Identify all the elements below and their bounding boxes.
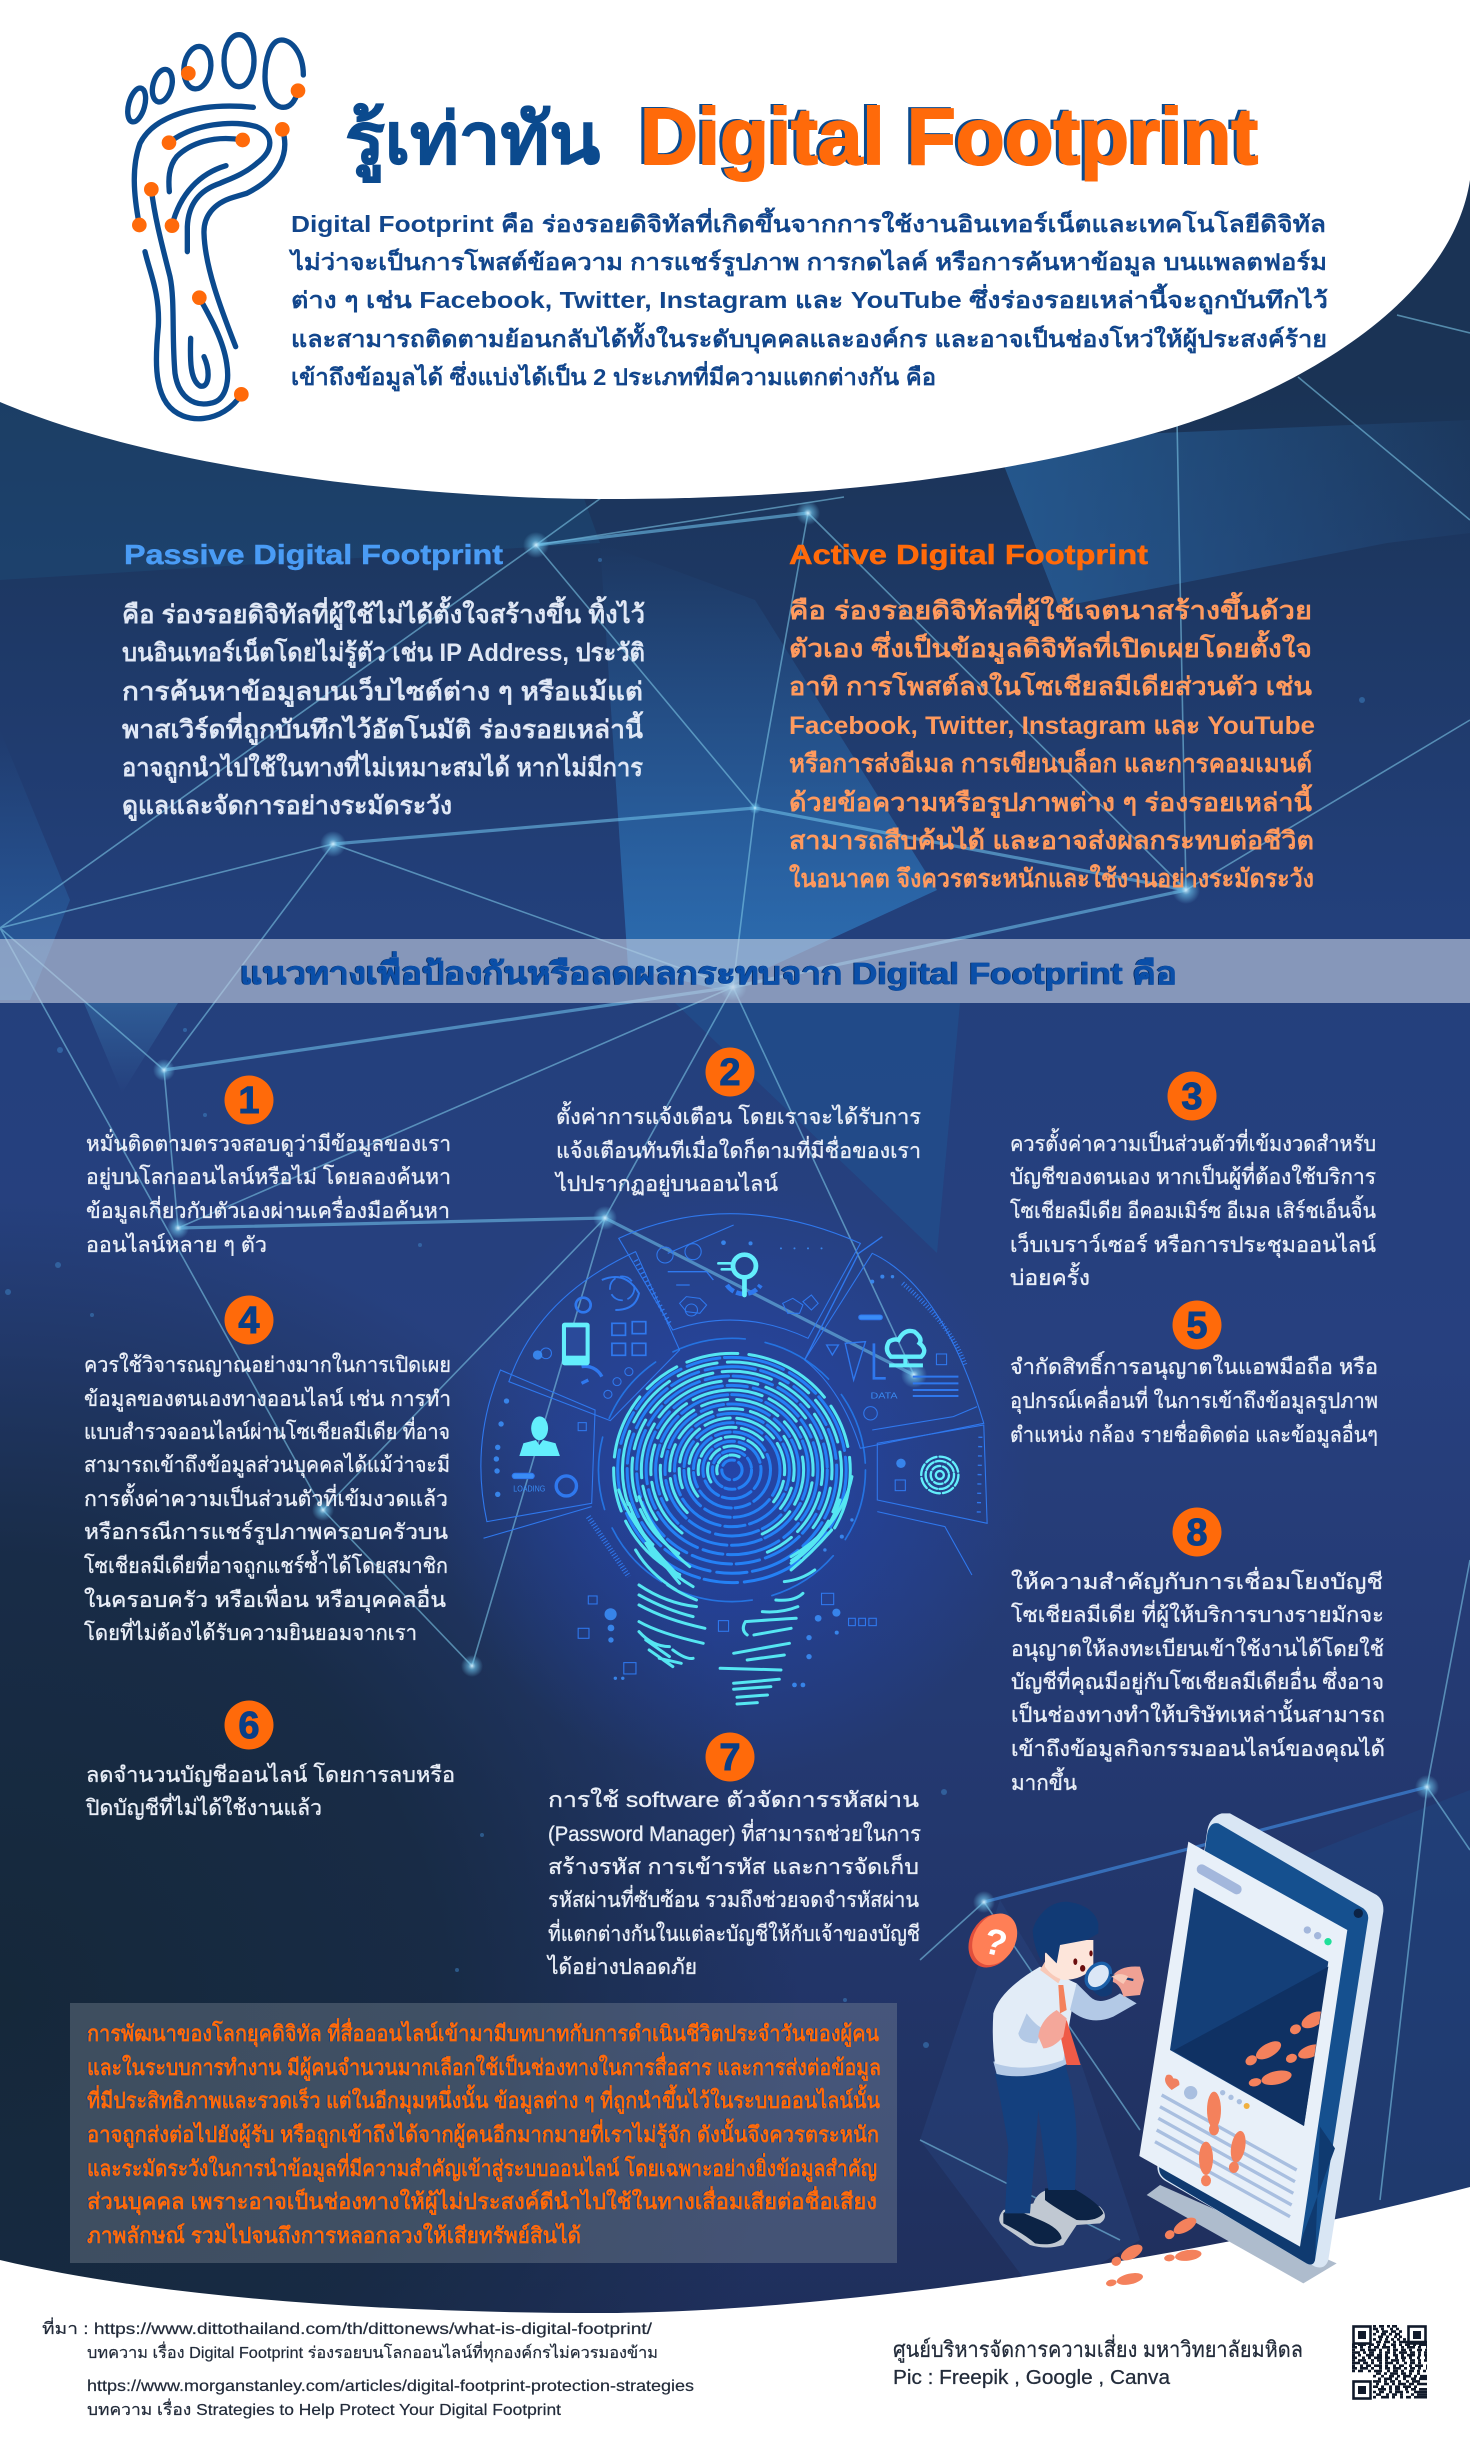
- panel: summary callout: ส่วนบุคคล เพราะอาจเป็นช่องทางให้ผู้ไม่ประสงค์ดีนำไปใช้ในทางเสื่อมเสียต่อชื่อเสียง: [87, 2185, 877, 2216]
- text: step 3: โซเชียลมีเดีย อีคอมเมิร์ซ อีเมล เสิร์ชเอ็นจิ้น: [1010, 1195, 1376, 1223]
- text block: active description: ในอนาคต จึงควรตระหนักและใช้งานอย่างระมัดระวัง: [789, 863, 1314, 893]
- text: loading and data labels: DATA: [871, 1391, 898, 1400]
- badge 6: 6: [238, 1705, 260, 1747]
- step 7: [546, 1732, 921, 1979]
- text: step 4: โซเชียลมีเดียที่อาจถูกแชร์ซ้ำได้โดยสมาชิก: [84, 1550, 448, 1579]
- text: step 7: รหัสผ่านที่ซับซ้อน รวมถึงช่วยจดจำรหัสผ่าน: [548, 1885, 919, 1912]
- badge 2: 2: [719, 1052, 741, 1094]
- text: step 7: สร้างรหัส การเข้ารหัส และการจัดเก็บ: [548, 1852, 919, 1879]
- panel: summary callout: การพัฒนาของโลกยุคดิจิทัล ที่สื่อออนไลน์เข้ามามีบทบาทกับการดำเนินชีวิตประจำวันของผู้คน: [87, 2017, 879, 2048]
- badge 3: 3: [1181, 1076, 1203, 1118]
- text: step 8: [1011, 1567, 1385, 1795]
- text block: introduction: [288, 207, 1328, 392]
- text block: sources: บทความ เรื่อง Digital Footprint ร่องรอยบนโลกออนไลน์ที่ทุกองค์กรไม่ควรมองข้าม: [87, 2341, 658, 2363]
- badge 7: [706, 1732, 754, 1782]
- text: step 5: อุปกรณ์เคลื่อนที่ ในการเข้าถึงข้อมูลรูปภาพ: [1010, 1386, 1378, 1414]
- text: step 1: อยู่บนโลกออนไลน์หรือไม่ โดยลองค้นหา: [86, 1164, 451, 1190]
- panel: passive digital footprint: [122, 539, 645, 822]
- badge 4: [224, 1296, 274, 1344]
- icon: mobile phone: [562, 1323, 590, 1365]
- text block: passive description: การค้นหาข้อมูลบนเว็บไซต์ต่าง ๆ หรือแม้แต่: [122, 676, 643, 708]
- illustration: man inspecting phone with footprints: [959, 1813, 1383, 2289]
- text block: credits: ศูนย์บริหารจัดการความเสี่ยง มหาวิทยาลัยมหิดล: [893, 2334, 1303, 2363]
- badge 1: [224, 1076, 274, 1124]
- illustration: fingerprint with technology HUD: [481, 1214, 987, 1704]
- text: step 6: ลดจำนวนบัญชีออนไลน์ โดยการลบหรือ: [86, 1762, 455, 1787]
- title: รู้เท่าทัน: [345, 100, 600, 183]
- icon: footprint logo: [124, 35, 305, 419]
- text block: active description: ตัวเอง ซึ่งเป็นข้อมูลดิจิทัลที่เปิดเผยโดยตั้งใจ: [789, 629, 1312, 665]
- text: step 7: ได้อย่างปลอดภัย: [546, 1954, 697, 1979]
- text block: active description: หรือการส่งอีเมล การเขียนบล็อก และการคอมเมนต์: [789, 748, 1312, 778]
- icon: question bubble: ?: [980, 1920, 1011, 1965]
- text: step 2: ไปปรากฏอยู่บนออนไลน์: [554, 1171, 778, 1197]
- text: step 4: หรือกรณีการแชร์รูปภาพครอบครัวบน: [84, 1520, 448, 1545]
- text: step 7: การใช้ software ตัวจัดการรหัสผ่าน: [548, 1787, 919, 1812]
- text: step 8: อนุญาตให้ลงทะเบียนเข้าใช้งานได้โดยใช้: [1011, 1636, 1384, 1662]
- text block: active description: Facebook, Twitter, Instagram และ YouTube: [789, 712, 1315, 740]
- panel: active digital footprint: [789, 539, 1315, 893]
- text: step 5: จำกัดสิทธิ์การอนุญาตในแอพมือถือ หรือ: [1010, 1351, 1378, 1380]
- text: step 2: ตั้งค่าการแจ้งเตือน โดยเราจะได้รับการ: [556, 1101, 921, 1129]
- panel: summary callout: และในระบบการทำงาน มีผู้คนจำนวนมากเลือกใช้เป็นช่องทางในการสื่อสาร และการส่งต่อข้อมูล: [87, 2051, 881, 2082]
- text: step 5: [1010, 1351, 1378, 1448]
- text block: active description: ด้วยข้อความหรือรูปภาพต่าง ๆ ร่องรอยเหล่านี้: [789, 783, 1313, 819]
- icon: cloud network: [887, 1331, 924, 1367]
- text: step 2: แจ้งเตือนทันทีเมื่อใดก็ตามที่มีชื่อของเรา: [556, 1136, 921, 1163]
- step 8: [1011, 1508, 1385, 1795]
- text: step 1: [86, 1129, 451, 1257]
- step 6: [86, 1700, 455, 1820]
- text: step 1: ข้อมูลเกี่ยวกับตัวเองผ่านเครื่องมือค้นหา: [86, 1196, 450, 1224]
- text: step 8: โซเชียลมีเดีย ที่ผู้ให้บริการบางรายมักจะ: [1011, 1600, 1384, 1628]
- badge 5: 5: [1186, 1305, 1208, 1347]
- text: step 3: ควรตั้งค่าความเป็นส่วนตัวที่เข้มงวดสำหรับ: [1010, 1128, 1376, 1156]
- text: step 4: ควรใช้วิจารณญาณอย่างมากในการเปิดเผย: [84, 1352, 451, 1377]
- panel: summary callout: ภาพลักษณ์ รวมไปจนถึงการหลอกลวงให้เสียทรัพย์สินได้: [87, 2222, 581, 2248]
- text block: passive description: คือ ร่องรอยดิจิทัลที่ผู้ใช้ไม่ได้ตั้งใจสร้างขึ้น ทิ้งไว้: [122, 595, 645, 631]
- text block: active description: สามารถสืบค้นได้ และอาจส่งผลกระทบต่อชีวิต: [789, 825, 1314, 855]
- icon: small fingerprint: [921, 1457, 958, 1493]
- text block: sources: [42, 2317, 694, 2419]
- step 1: [86, 1076, 451, 1257]
- text block: active description: อาทิ การโพสต์ลงในโซเชียลมีเดียส่วนตัว เช่น: [789, 671, 1312, 701]
- text: step 8: เข้าถึงข้อมูลกิจกรรมออนไลน์ของคุณได้: [1011, 1736, 1385, 1762]
- text block: passive description: ดูแลและจัดการอย่างระมัดระวัง: [122, 792, 452, 822]
- badge 8: [1172, 1508, 1222, 1556]
- icon: QR code: [1352, 2326, 1427, 2398]
- heading band: prevention guidelines: [0, 939, 1470, 1003]
- panel: summary callout: [70, 2003, 897, 2263]
- graphic: fingerprint lower ridges: [619, 1477, 852, 1704]
- phone: [1139, 1813, 1383, 2283]
- text: step 7: ที่แตกต่างกันในแต่ละบัญชีให้กับเจ้าของบัญชี: [548, 1919, 920, 1946]
- text: step 4: ในครอบครัว หรือเพื่อน หรือบุคคลอื่น: [84, 1585, 446, 1613]
- text: step 4: การตั้งค่าความเป็นส่วนตัวที่เข้มงวดแล้ว: [84, 1483, 448, 1511]
- text block: passive description: อาจถูกนำไปใช้ในทางที่ไม่เหมาะสมได้ หากไม่มีการ: [122, 750, 644, 784]
- text: step 4: [84, 1352, 451, 1645]
- badge 7: 7: [719, 1737, 741, 1779]
- badge 8: 8: [1186, 1512, 1208, 1554]
- text: step 4: แบบสำรวจออนไลน์ผ่านโซเชียลมีเดีย ที่อาจ: [84, 1417, 450, 1444]
- text: step 8: เป็นช่องทางทำให้บริษัทเหล่านั้นสามารถ: [1011, 1699, 1385, 1727]
- panel: summary callout: ที่มีประสิทธิภาพและรวดเร็ว แต่ในอีกมุมหนึ่งนั้น ข้อมูลต่าง ๆ ที่ถูกนำขึ้นไว้ในระบบออนไลน์นั้น: [87, 2084, 880, 2115]
- text block: credits: [893, 2334, 1303, 2389]
- text: step 3: บัญชีของตนเอง หากเป็นผู้ที่ต้องใช้บริการ: [1010, 1162, 1376, 1190]
- text block: credits: Pic : Freepik , Google , Canva: [893, 2367, 1171, 2389]
- footprints on screen: [1105, 2008, 1327, 2289]
- text block: introduction: ไม่ว่าจะเป็นการโพสต์ข้อความ การแชร์รูปภาพ การกดไลค์ หรือการค้นหาข้อมูล บนแพลตฟอร์ม: [288, 247, 1327, 277]
- text block: sources: ที่มา : https://www.dittothailand.com/th/dittonews/what-is-digital-footprint/: [42, 2317, 653, 2338]
- text: step 4: โดยที่ไม่ต้องได้รับความยินยอมจากเรา: [84, 1618, 417, 1645]
- text block: sources: บทความ เรื่อง Strategies to Help Protect Your Digital Footprint: [87, 2398, 562, 2419]
- text: step 8: มากขึ้น: [1011, 1767, 1077, 1795]
- text block: active description: [789, 591, 1315, 893]
- text: step 3: [1010, 1128, 1376, 1290]
- badge 4: 4: [238, 1300, 260, 1342]
- text: step 3: บ่อยครั้ง: [1010, 1262, 1090, 1290]
- badge 2: [706, 1048, 754, 1096]
- graphic: fingerprint ridges: [572, 1312, 892, 1704]
- step 2: [554, 1048, 921, 1197]
- text block: sources: https://www.morganstanley.com/articles/digital-footprint-protection-strategies: [87, 2378, 694, 2395]
- text: loading and data labels: LOADING: [513, 1485, 545, 1494]
- text block: introduction: Digital Footprint คือ ร่องรอยดิจิทัลที่เกิดขึ้นจากการใช้งานอินเทอร์เน็ตและเทคโนโลยีดิจิทัล: [291, 207, 1326, 237]
- man: [993, 1902, 1144, 2247]
- text: step 7: (Password Manager) ที่สามารถช่วยในการ: [548, 1819, 921, 1846]
- icon: person: [519, 1416, 560, 1456]
- text: step 4: สามารถเข้าถึงข้อมูลส่วนบุคคลได้แม้ว่าจะมี: [84, 1452, 450, 1478]
- text block: introduction: ต่าง ๆ เช่น Facebook, Twitter, Instagram และ YouTube ซึ่งร่องรอยเหล่านี้จะถูกบันทึกไว้: [291, 283, 1328, 315]
- text: step 2: [554, 1101, 921, 1197]
- step 3: [1010, 1072, 1376, 1290]
- text: step 4: ข้อมูลของตนเองทางออนไลน์ เช่น การทำ: [84, 1386, 451, 1412]
- step 4: [84, 1296, 451, 1645]
- badge 5: [1172, 1300, 1222, 1350]
- icon: question bubble: [959, 1905, 1026, 1976]
- step 5: [1010, 1300, 1378, 1448]
- text block: passive description: พาสเวิร์ดที่ถูกบันทึกไว้อัตโนมัติ ร่องรอยเหล่านี้: [122, 710, 644, 746]
- text: step 8: ให้ความสำคัญกับการเชื่อมโยงบัญชี: [1011, 1567, 1383, 1594]
- title: Digital Footprint: [640, 92, 1258, 181]
- bottom white curved panel: [0, 2187, 1470, 2442]
- text: step 6: ปิดบัญชีที่ไม่ได้ใช้งานแล้ว: [86, 1793, 322, 1820]
- badge 6: [224, 1700, 274, 1750]
- text: step 7: [546, 1787, 921, 1979]
- text block: introduction: และสามารถติดตามย้อนกลับได้ทั้งในระดับบุคคลและองค์กร และอาจเป็นช่องโหว่ให้ผู้ประสงค์ร้าย: [291, 322, 1327, 354]
- heading: passive: Passive Digital Footprint: [124, 539, 503, 570]
- text: step 5: ตำแหน่ง กล้อง รายชื่อติดต่อ และข้อมูลอื่นๆ: [1010, 1420, 1378, 1448]
- text: step 3: เว็บเบราว์เซอร์ หรือการประชุมออนไลน์: [1010, 1230, 1376, 1258]
- heading: active: Active Digital Footprint: [789, 539, 1148, 570]
- text block: introduction: เข้าถึงข้อมูลได้ ซึ่งแบ่งได้เป็น 2 ประเภทที่มีความแตกต่างกัน คือ: [291, 360, 936, 392]
- badge 1: 1: [238, 1080, 260, 1122]
- icon: magnifier: [718, 1255, 756, 1295]
- text block: passive description: บนอินเทอร์เน็ตโดยไม่รู้ตัว เช่น IP Address, ประวัติ: [122, 637, 645, 669]
- badge 3: [1168, 1072, 1216, 1120]
- text: loading and data labels: [513, 1391, 898, 1494]
- text: step 1: หมั่นติดตามตรวจสอบดูว่ามีข้อมูลของเรา: [86, 1129, 451, 1157]
- title: [345, 92, 1258, 183]
- top white curved panel: [0, 0, 1470, 499]
- text block: active description: คือ ร่องรอยดิจิทัลที่ผู้ใช้เจตนาสร้างขึ้นด้วย: [789, 591, 1312, 627]
- text: step 8: บัญชีที่คุณมีอยู่กับโซเชียลมีเดียอื่น ซึ่งอาจ: [1011, 1667, 1384, 1695]
- text: step 6: [86, 1762, 455, 1820]
- panel: summary callout: อาจถูกส่งต่อไปยังผู้รับ หรือถูกเข้าถึงได้จากผู้คนอีกมากมายที่เราไม่รู้จัก ดังนั้นจึงควรตระหนัก: [87, 2118, 879, 2149]
- panel: summary callout: และระมัดระวังในการนำข้อมูลที่มีความสำคัญเข้าสู่ระบบออนไลน์ โดยเฉพาะอย่างยิ่งข้อมูลสำคัญ: [87, 2152, 877, 2183]
- text block: passive description: [122, 595, 645, 822]
- text: step 1: ออนไลน์หลาย ๆ ตัว: [86, 1232, 267, 1257]
- heading band: prevention guidelines: แนวทางเพื่อป้องกันหรือลดผลกระทบจาก Digital Footprint คือ: [240, 951, 1177, 991]
